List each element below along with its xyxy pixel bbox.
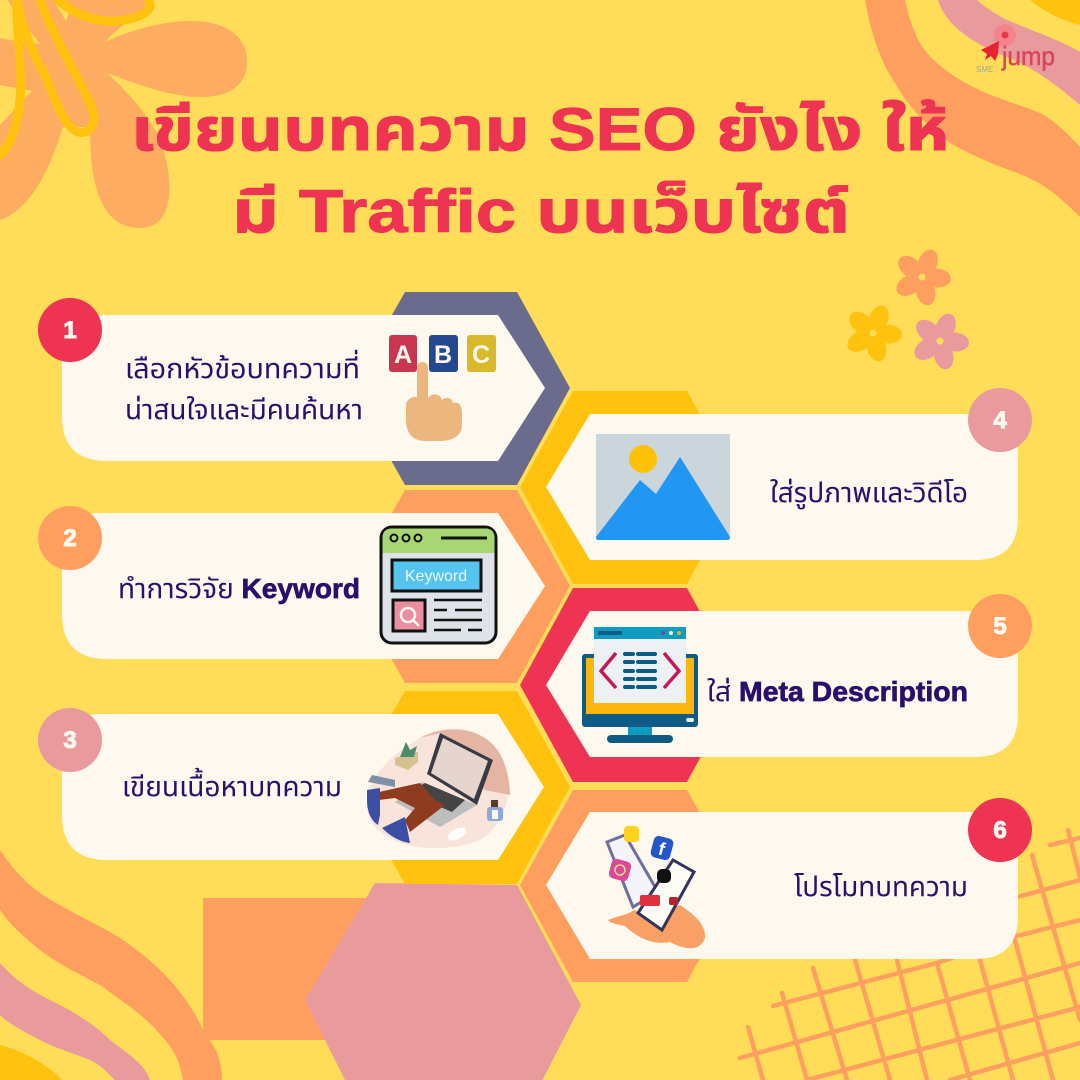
badge 3 [38,708,102,772]
decorative waves top-right [865,0,1080,217]
badge 6 [968,798,1032,862]
badge 1: 1 [63,317,77,344]
decorative flower top-left [0,0,247,228]
hexagon frame 4 [520,391,740,584]
decorative flowers [834,239,979,379]
badge 6: 6 [993,817,1007,844]
icon: ABC hand [389,335,496,441]
step 4 panel [520,388,1032,584]
badge 5: 5 [993,613,1007,640]
text 4: ใส่รูปภาพและวิดีโอ [770,477,968,510]
logo: SME jump: jump [1001,41,1055,71]
hexagon frame 3 [350,691,570,884]
badge 1 [38,298,102,362]
icon: phones and social media: f [656,839,668,860]
icon: phones and social media [607,826,705,948]
card 1 [62,315,545,461]
step 2 panel [38,490,570,683]
logo: SME jump [976,24,1055,74]
icon: keyword browser: Keyword [405,568,467,585]
icon: ABC hand: C [472,341,490,369]
text 2: ทำการวิจัย Keyword [118,573,360,604]
badge 4: 4 [993,407,1007,434]
text 3: เขียนเนื้อหาบทความ [122,767,342,802]
icon: image placeholder [596,434,730,540]
card 6 [546,812,1018,959]
icon: laptop illustration [367,729,510,848]
hexagon frame 5 [520,588,740,782]
icon: monitor code [582,627,698,743]
card 5 [546,611,1018,757]
badge 2 [38,506,102,570]
text 1 [125,349,363,425]
text 1: เลือกหัวข้อบทความที่ [125,349,360,384]
card 2 [62,513,545,659]
badge 3: 3 [63,727,77,754]
decorative grid bottom-right [740,830,1080,1080]
icon: keyword browser [381,527,496,643]
step 5 panel [520,588,1032,782]
badge 4 [968,388,1032,452]
title: เขียนบทความ SEO ยังไง ให้ [131,96,949,163]
card 4 [546,414,1018,560]
orange square behind pink hexagon [203,898,373,1040]
hexagon frame 6 [520,790,740,982]
title [131,96,949,245]
title: มี Traffic บนเว็บไซต์ [232,178,850,245]
badge 5 [968,594,1032,658]
badge 2: 2 [63,525,77,552]
card 3 [62,714,544,860]
text 6: โปรโมทบทความ [794,871,968,902]
hexagon frame 1 [350,292,570,485]
text 1: น่าสนใจและมีคนค้นหา [125,394,363,425]
step 6 panel [520,790,1032,982]
hexagon frame 2 [350,490,570,683]
step 1 panel [38,292,570,485]
icon: ABC hand: A [394,341,412,369]
step 3 panel [38,691,570,884]
icon: ABC hand: B [434,341,452,369]
pink hexagon [305,883,581,1080]
decorative waves bottom-left [0,850,222,1080]
text 5: ใส่ Meta Description [707,676,968,707]
logo: SME jump: SME [976,65,993,74]
